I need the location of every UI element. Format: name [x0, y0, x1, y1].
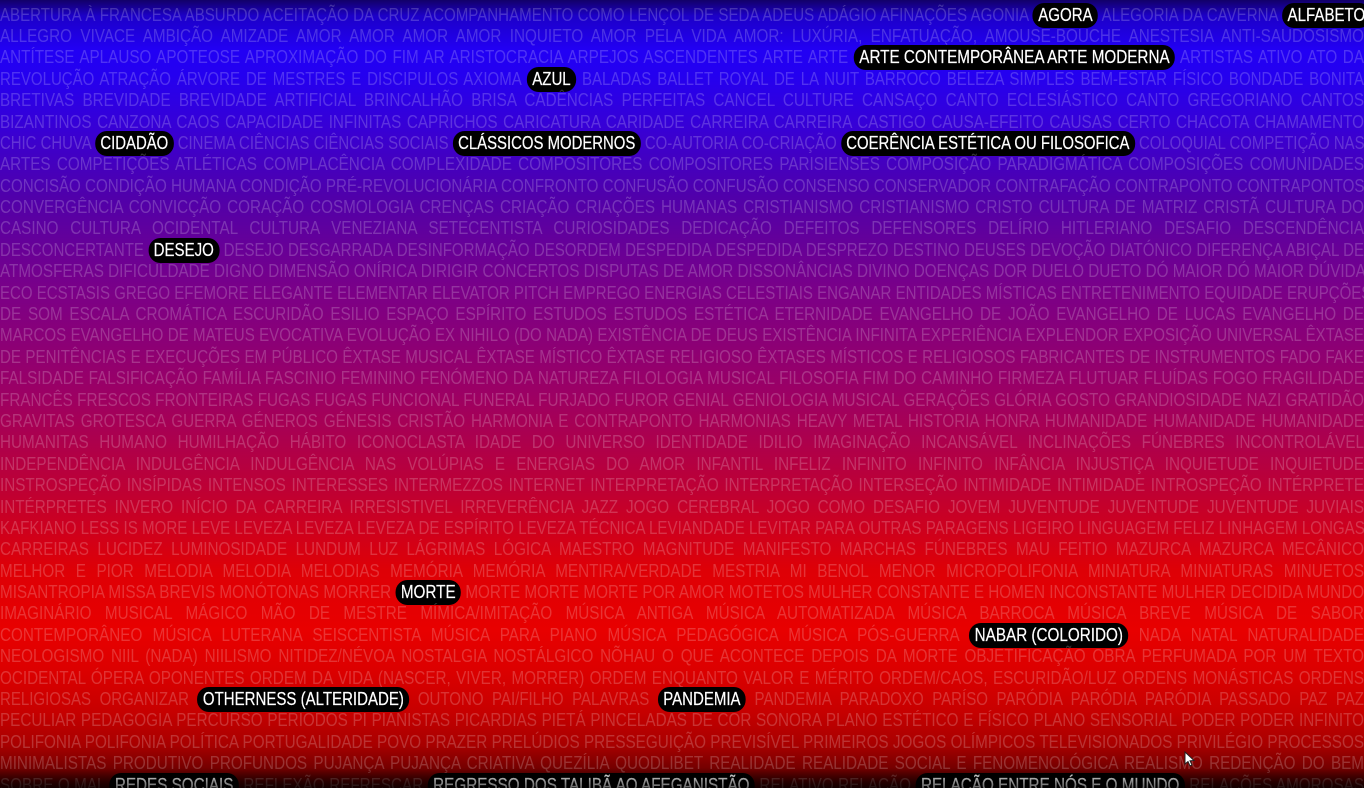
text row 32: OCIDENTAL ÓPERA OPONENTES ORDEM DA VIDA (NASCER, VIVER, MORRER) ORDEM ENQUANTO VALOR E MÉRITO ORDEM/CAOS, ESCURIDÃO/LUZ ORDENS MONÁSTICAS ORDENS: [0, 668, 1364, 688]
text row 13: ATMOSFERAS DIFICULDADE DIGNO DIMENSÃO ONÍRICA DIRIGIR CONCERTOS DISPUTAS DE AMOR DISSONÂNCIAS DIVINO DOENÇAS DOR DUELO DUETO DÓ MAIOR DÓ MAIOR DÚVIDA: [0, 261, 1364, 281]
text row 1: ABERTURA À FRANCESA ABSURDO ACEITAÇÃO DA CRUZ ACOMPANHAMENTO COMO LENÇOL DE SEDA ADEUS ADÁGIO AFINAÇÕES AGONIA ALEGORIA DA CAVERNA: [0, 4, 1278, 24]
text row 9: CONCISÃO CONDIÇÃO HUMANA CONDIÇÃO PRÉ-REVOLUCIONÁRIA CONFRONTO CONFUSÃO CONFUSÃO CONSENSO CONSERVADOR CONTRAFAÇÃO CONTRAPONTO CONTRAPONTOS: [0, 176, 1364, 196]
highlighted word: ALFABETO: ALFABETO: [1288, 4, 1364, 24]
highlighted word: MORTE: MORTE: [401, 582, 456, 602]
highlighted word: AZUL: AZUL: [532, 69, 571, 89]
text row 35: POLIFONIA POLIFONIA POLÍTICA PORTUGALIDADE POVO PRAZER PRELÚDIOS PRESSEGUIÇÃO PREVISÍVEL PRIMEIROS JOGOS OLÍMPICOS TELEVISIONADOS PRIVILÉGIO PROCESSOS: [0, 732, 1364, 752]
text row 29: IMAGINÁRIO MUSICAL MÁGICO MÃO DE MESTRE MÍMICA/IMITAÇÃO MÚSICA ANTIGA MÚSICA AUTOMATIZADA MÚSICA BARROCA MÚSICA BREVE MÚSICA DE SABOR: [0, 603, 1364, 623]
text row 22: INDEPENDÊNCIA INDULGÊNCIA INDULGÊNCIA NAS VOLÚPIAS E ENERGIAS DO AMOR INFANTIL INFELIZ INFINITO INFINITO INFÂNCIA INJUSTIÇA INQUIETUDE INQUIETUDE: [0, 454, 1364, 474]
text row 2: ALLEGRO VIVACE AMBIÇÃO AMIZADE AMOR AMOR AMOR AMOR INQUIETO AMOR PELA VIDA AMOR: LUXÚRIA, ENFATUAÇÃO, AMOUSE-BOUCHE ANESTESIA ANTI-SAUDOSISMO: [0, 26, 1364, 46]
text row 16: MARCOS EVANGELHO DE MATEUS EVOCATIVA EVOLUÇÃO EX NIHILO (DO NADA) EXISTÊNCIA DE DEUS EXISTÊNCIA INFINITA EXPERIÊNCIA EXPLENDOR EXPOSIÇÃO UNIVERSAL ÊXTASE: [0, 325, 1364, 345]
text row 30: CONTEMPORÂNEO MÚSICA LUTERANA SEISCENTISTA MÚSICA PARA PIANO MÚSICA PEDAGÓGICA MÚSICA PÓS-GUERRA NADA NATAL NATURALIDADE: [0, 625, 1364, 645]
text row 14: ECO ECSTASIS GREGO EFEMORE ELEGANTE ELEMENTAR ELEVATOR PITCH EMPREGO ENERGIAS CELESTIAIS ENGANAR ENTIDADES MÍSTICAS ENTRETENIMENTO EQUIDADE ERUPÇÕES: [0, 283, 1364, 303]
text row 6: BIZANTINOS CANZONA CAOS CAPACIDADE INFINITAS CAPRICHOS CARICATURA CARIDADE CARREIRA CARREIRA CASTIGO CAUSA-EFEITO CAUSAS CERTO CHACOTA CHAMAMENTO: [0, 112, 1364, 132]
highlighted word: DESEJO: [148, 238, 219, 263]
text row 18: FALSIDADE FALSIFICAÇÃO FAMÍLIA FASCINIO FEMININO FENÓMENO DA NATUREZA FILOLOGIA MUSICAL FILOSOFIA FIM DO CAMINHO FIRMEZA FLUTUAR FLUÍDAS FOGO FRAGILIDADE: [0, 368, 1364, 388]
text row 31: NEOLOGISMO NIIL (NADA) NIILISMO NITIDEZ/NÉVOA NOSTALGIA NOSTÁLGICO NÕHAU O QUE ACONTECE DEPOIS DA MORTE OBJETIFICAÇÃO OBRA PERFUMADA POR UM TEXTO: [0, 646, 1364, 666]
text row 15: DE SOM ESCALA CROMÁTICA ESCURIDÃO ESILIO ESPAÇO ESPÍRITO ESTUDOS ESTUDOS ESTÉTICA ETERNIDADE EVANGELHO DE JOÃO EVANGELHO DE LUCAS EVANGELHO DE: [0, 304, 1364, 324]
text row 4: REVOLUÇÃO ATRAÇÃO ÁRVORE DE MESTRES E DISCIPULOS AXIOMA BALADAS BALLET ROYAL DE LA NUIT BARROCO BELEZA SIMPLES BEM-ESTAR FÍSICO BONDADE BONITA: [0, 69, 1364, 89]
text row 36: MINIMALISTAS PRODUTIVO PROFUNDOS PUJANÇA PUJANÇA CRIATIVA QUEZÍLIA QUODLIBET REALIDADE REALIDADE SOCIAL E FENOMENOLÓGICA REALISMO REDENÇÃO DO BEM: [0, 753, 1364, 773]
highlighted word: AGORA: AGORA: [1038, 4, 1093, 24]
text row 33: RELIGIOSAS ORGANIZAR OUTONO PAI/FILHO PALAVRAS PANDEMIA PARADOXO PARÍSO PARÓDIA PARÓDIA PARÓDIA PASSADO PAZ PAZ: [0, 689, 1364, 709]
bottom fade overlay: [0, 768, 1364, 788]
text row 20: GRAVITAS GROTESCA GUERRA GÉNEROS GÉNESIS CRISTÃO HARMONIA E CONTRAPONTO HARMONIAS HEAVY METAL HISTORIA HONRA HUMANIDADE HUMANIDADE HUMANIDADE: [0, 411, 1364, 431]
highlighted word: AGORA: [1033, 2, 1098, 28]
text row 23: INSTROSPEÇÃO INSÍPIDAS INTENSOS INTERESSES INTERMEZZOS INTERNET INTERPRETAÇÃO INTERPRETAÇÃO INTERSEÇÃO INTIMIDADE INTIMIDADE INTROSPEÇÃO INTÉRPRETE: [0, 475, 1364, 495]
text row 34: PECULIAR PEDAGOGIA PERCURSO PERIODOS PI PIANISTAS PICARDIAS PIETÁ PINCELADAS DE COR SONORA PLANO ESTÉTICO E FÍSICO PLANO SENSORIAL PODER PODER INFINITO: [0, 710, 1364, 730]
text row 12: DESCONCERTANTE DESEJO DESGARRADA DESINFORMAÇÃO DESORDEM DESPEDIDA DESPEDIDA DESPREZO DESTINO DEUSES DEVOÇÃO DIATÓNICO DIFERENÇA ABIÇAL DE: [0, 240, 1364, 260]
text row 8: ARTES COMPETIÇÕES ATLÉTICAS COMPLACÊNCIA COMPLEXIDADE COMPOSITORES COMPOSITORES PARISIENSES COMPOSIÇÃO PARADIGMÁTICA COMPOSIÇÕES COMUNIDADES: [0, 154, 1364, 174]
highlighted word: AZUL: [527, 67, 576, 92]
text row 24: INTÉRPRETES INVERO INÍCIO DA CARREIRA IRRESISTIVEL IRREVERÊNCIA JAZZ JOGO CEREBRAL JOGO COMO DESAFIO JOVEM JUVENTUDE JUVENTUDE JUVENTUDE JUVIAIS: [0, 496, 1364, 516]
highlighted word: COERÊNCIA ESTÉTICA OU FILOSOFICA: COERÊNCIA ESTÉTICA OU FILOSOFICA: [846, 133, 1129, 153]
text row 10: CONVERGÊNCIA CONVICÇÃO CORAÇÃO COSMOLOGIA CRENÇAS CRIAÇÃO CRIAÇÕES HUMANAS CRISTIANISMO CRISTIANISMO CRISTO CULTURA DE MATRIZ CRISTÃ CULTURA DO: [0, 197, 1364, 217]
text row 5: BRETIVAS BREVIDADE BREVIDADE ARTIFICIAL BRINCALHÃO BRISA CADÊNCIAS PERFEITAS CANCEL CULTURE CANSAÇO CANTO ECLESIÁSTICO CANTO GREGORIANO CANTOS: [0, 90, 1364, 110]
text row 26: CARREIRAS LUCIDEZ LUMINOSIDADE LUNDUM LUZ LÁGRIMAS LÓGICA MAESTRO MAGNITUDE MANIFESTO MARCHAS FÚNEBRES MAU FEITIO MAZURCA MAZURCA MECÂNICO: [0, 539, 1364, 559]
highlighted word: OTHERNESS (ALTERIDADE): OTHERNESS (ALTERIDADE): [203, 689, 404, 709]
highlighted word: CLÁSSICOS MODERNOS: CLÁSSICOS MODERNOS: [458, 133, 635, 153]
highlighted word: DESEJO: DESEJO: [154, 240, 214, 260]
text row 28: MISANTROPIA MISSA BREVIS MONÓTONAS MORRER MORTE MORTE MORTE POR AMOR MOTETOS MULHER CONSTANTE E HOMEN INCONSTANTE MULHER DECIDIDA MUNDO: [0, 582, 1364, 602]
highlighted word: CIDADÃO: [95, 131, 174, 156]
text row 21: HUMANITAS HUMANO HUMILHAÇÃO HÁBITO ICONOCLASTA IDADE DO UNIVERSO IDENTIDADE IDILIO IMAGINAÇÃO INCANSÁVEL INCLINAÇÕES FÚNEBRES INCONTROLÁVEL: [0, 432, 1364, 452]
text row 3: ANTÍTESE APLAUSO APOTEOSE APROXIMAÇÃO DO FIM AR ARISTOCRACIA ARPEJOS ASCENDENTES ARTE ARTE ARTISTAS ATIVO ATO DA: [0, 47, 1364, 67]
text row 25: KAFKIANO LESS IS MORE LEVE LEVEZA LEVEZA LEVEZA DE ESPÍRITO LEVEZA TÉCNICA LEVIANDADE LEVITAR PARA OUTRAS PARAGENS LIGEIRO LINGUAGEM FELIZ LINHAGEM LONGAS: [0, 518, 1364, 538]
highlighted word: PANDEMIA: PANDEMIA: [663, 689, 741, 709]
text row 27: MELHOR E PIOR MELODIA MELODIA MELODIAS MEMÓRIA MEMÓRIA MENTIRA/VERDADE MESTRIA MI BENOL MENOR MICROPOLIFONIA MINIATURA MINIATURAS MINUETOS: [0, 561, 1364, 581]
text row 11: CASINO CULTURA OCIDENTAL CULTURA VENEZIANA SETECENTISTA CURIOSIDADES DEDICAÇÃO DEFEITOS DEFENSORES DELÍRIO HITLERIANO DESAFIO DESCENDÊNCIA: [0, 218, 1364, 238]
highlighted word: ARTE CONTEMPORÂNEA ARTE MODERNA: ARTE CONTEMPORÂNEA ARTE MODERNA: [859, 47, 1170, 67]
highlighted word: NABAR (COLORIDO): NABAR (COLORIDO): [975, 625, 1123, 645]
highlighted word: MORTE: [395, 580, 461, 605]
icon: mouse cursor: [1184, 751, 1195, 767]
text row 7: CHIC CHUVA CINEMA CIÊNCIAS CIÊNCIAS SOCIAIS CO-AUTORIA CO-CRIAÇÃO COLOQUIAL COMPETIÇÃO NAS: [0, 133, 1364, 153]
text row 17: DE PENITÊNCIAS E EXECUÇÕES EM PÚBLICO ÊXTASE MUSICAL ÊXTASE MÍSTICO ÊXTASE RELIGIOSO ÊXTASES MÍSTICOS E RELIGIOSOS FABRICANTES DE INSTRUMENTOS FADO FAKE: [0, 347, 1364, 367]
highlighted word: CIDADÃO: CIDADÃO: [100, 133, 168, 153]
text row 19: FRANCÊS FRESCOS FRONTEIRAS FUGAS FUGAS FUNCIONAL FUNERAL FURJADO FUROR GENIAL GENIOLOGIA MUSICAL GERAÇÕES GLÓRIA GOSTO GRANDIOSIDADE NAZI GRATIDÃO: [0, 390, 1364, 410]
